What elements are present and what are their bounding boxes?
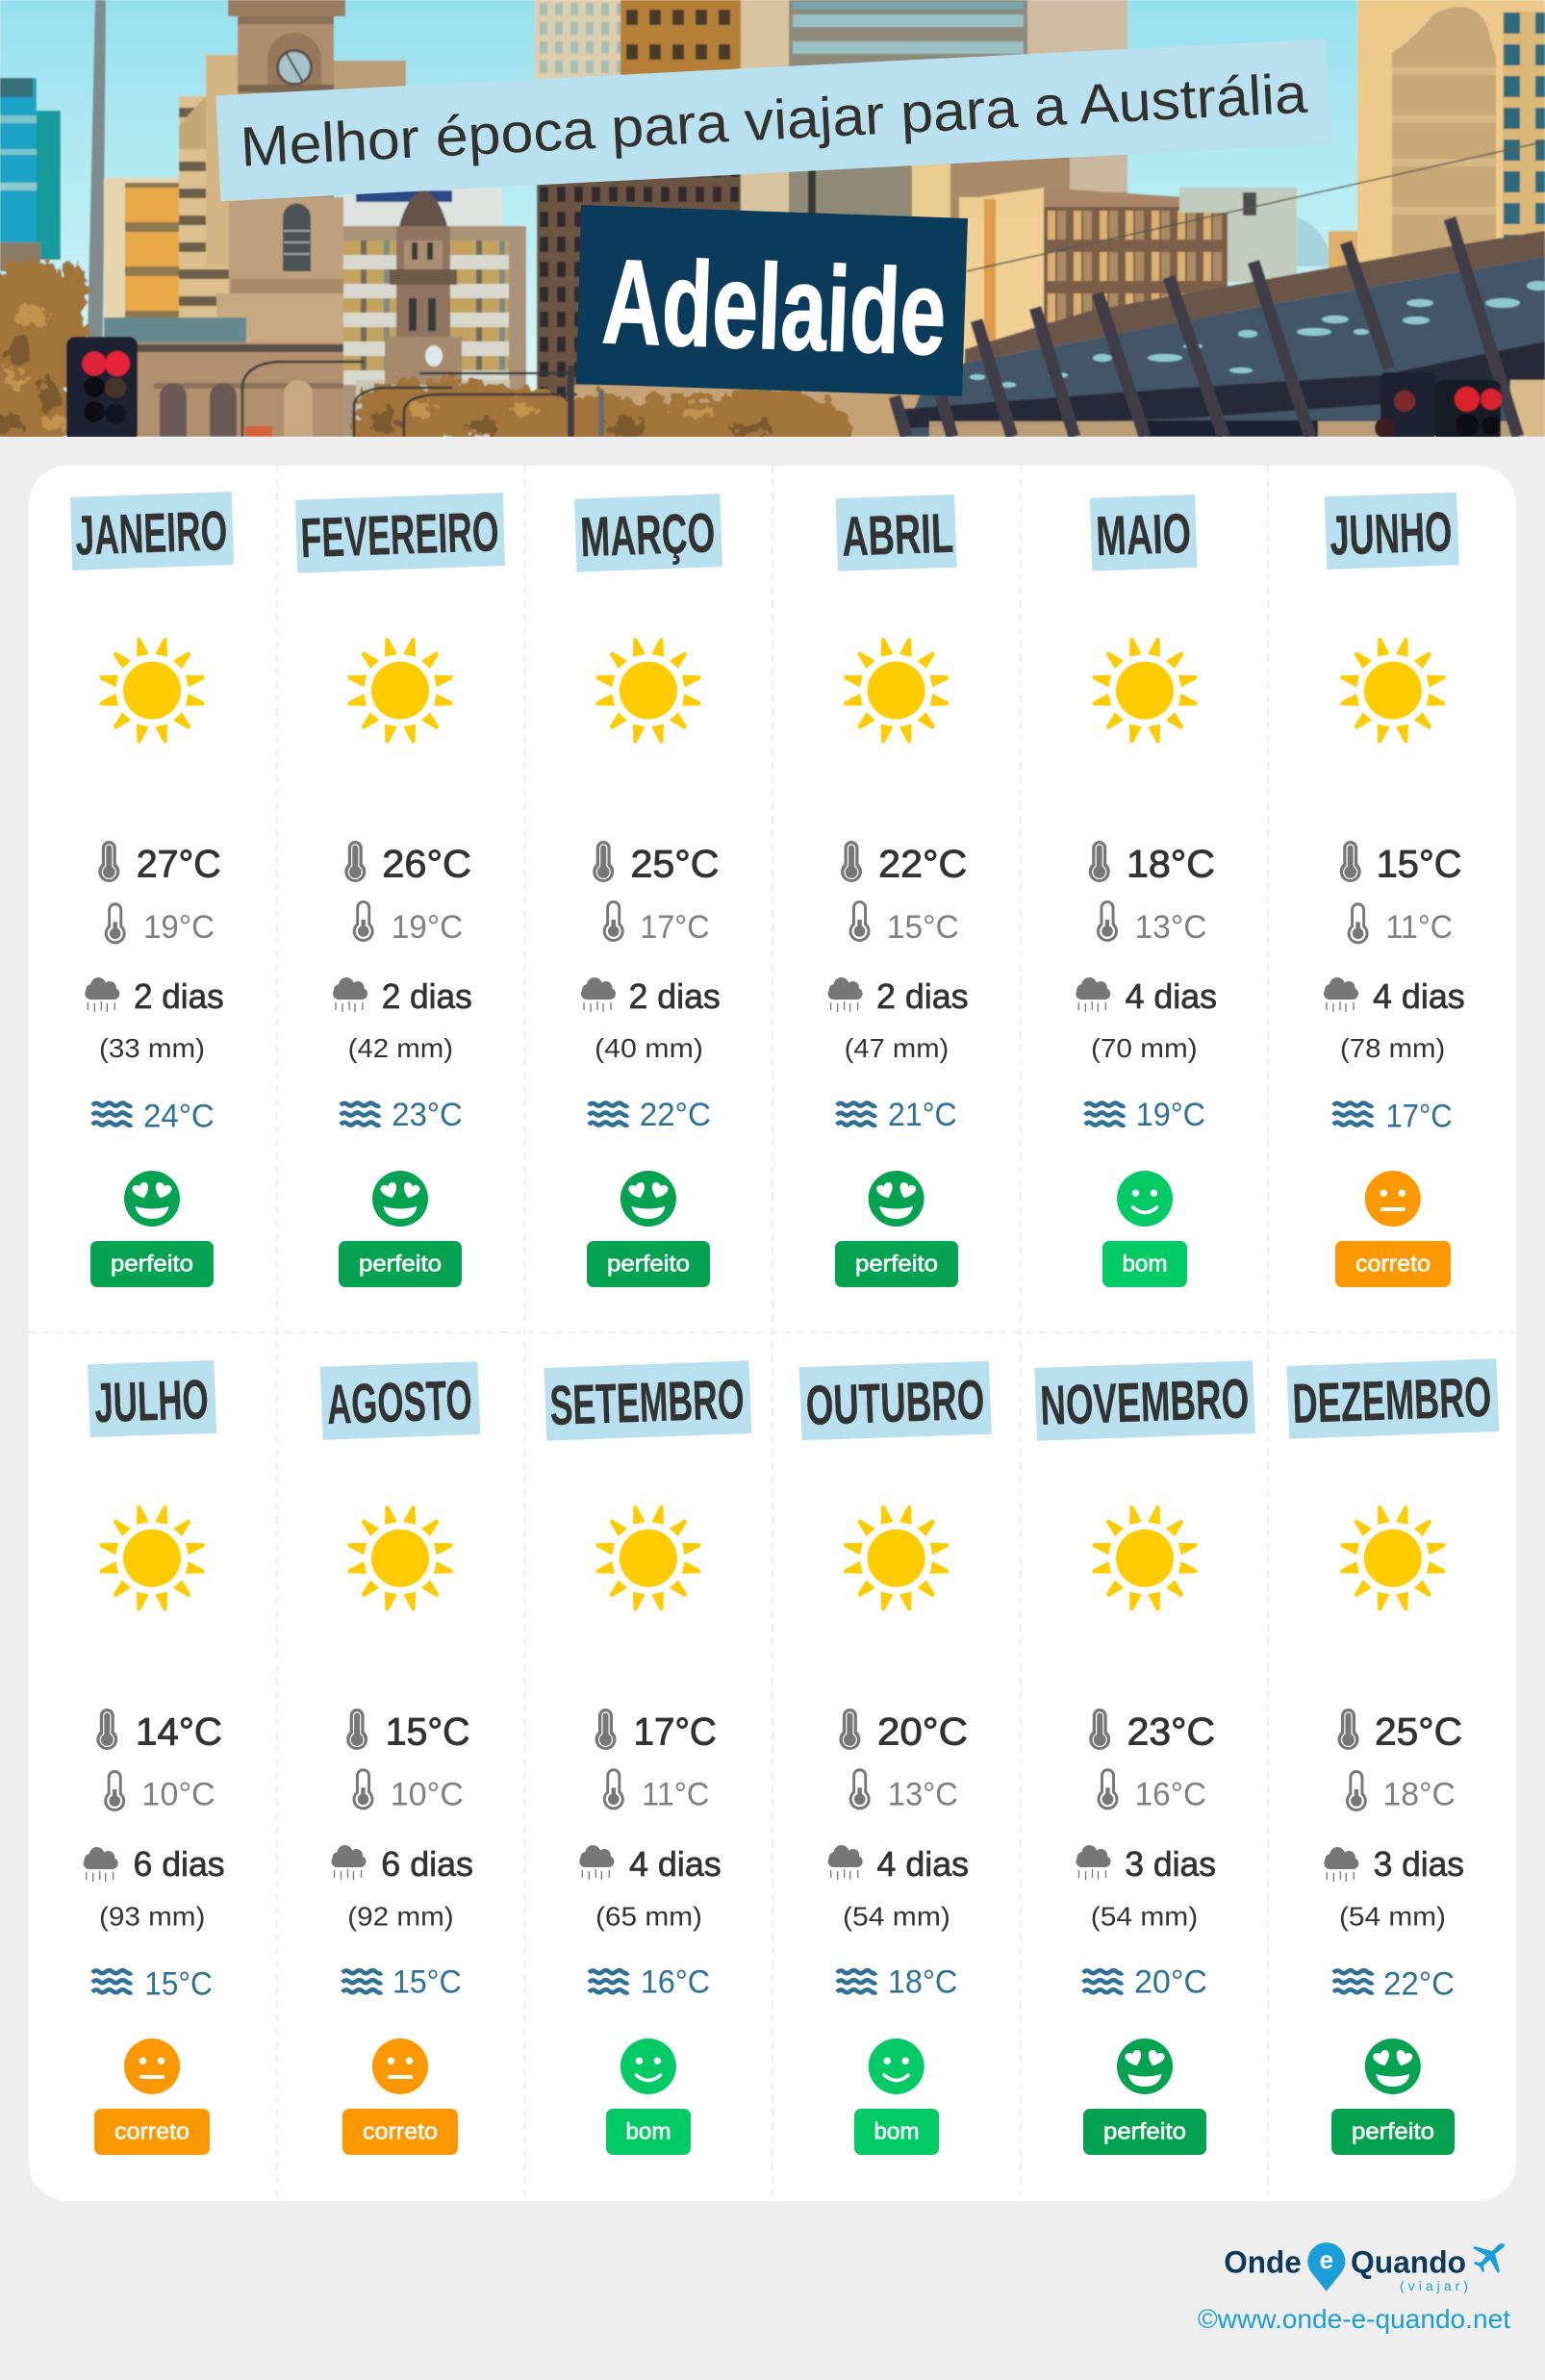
sea temperature — [1085, 1097, 1205, 1133]
panel: abril — [828, 494, 969, 1287]
church body — [216, 293, 351, 346]
panel: monthly climate card — [29, 466, 1516, 2201]
rating badge: perfeito — [1103, 2118, 1186, 2145]
icon: sun — [348, 1506, 452, 1610]
rainy days: 6 dias — [133, 1844, 225, 1884]
sea temperature: 18°C — [888, 1964, 957, 2001]
min temperature: 10°C — [391, 1777, 464, 1813]
rating badge: perfeito — [359, 1252, 442, 1278]
max temperature: 23°C — [1127, 1710, 1215, 1753]
rainy days — [1076, 976, 1217, 1016]
rating badge: bom — [874, 2118, 920, 2145]
rainy days: 2 dias — [134, 976, 224, 1016]
icon: sun — [100, 638, 204, 743]
rainy days — [1076, 1844, 1216, 1884]
icon: rating face — [1117, 2038, 1173, 2094]
sea temperature: 24°C — [143, 1099, 215, 1135]
panel: novembro — [1034, 1360, 1255, 2155]
rating badge: correto — [363, 2118, 438, 2145]
month label: junho — [1325, 493, 1459, 570]
rainfall: (42 mm) — [348, 1033, 453, 1063]
rainfall: (92 mm) — [347, 1901, 454, 1931]
title band: Melhor época para viajar para a Austrália — [239, 63, 1309, 179]
min temperature: 10°C — [141, 1777, 215, 1813]
max temperature — [1089, 1709, 1215, 1753]
min temperature: 18°C — [1383, 1777, 1456, 1813]
icon: rating face — [124, 1171, 180, 1227]
rainy days: 2 dias — [629, 976, 721, 1016]
max temperature: 14°C — [136, 1710, 222, 1753]
icon: sun — [596, 1506, 700, 1610]
rainy days: 2 dias — [382, 976, 472, 1016]
month label: agosto — [320, 1361, 480, 1440]
min temperature: 19°C — [392, 909, 463, 946]
rainy days — [1324, 1844, 1464, 1884]
icon: rating face — [1117, 1171, 1173, 1227]
max temperature: 20°C — [877, 1710, 968, 1753]
panel: julho — [84, 1360, 225, 2155]
rainfall: (54 mm) — [843, 1901, 950, 1931]
month label: fevereiro: FEVEREIRO — [299, 500, 500, 570]
rainy days: 3 dias — [1374, 1844, 1464, 1884]
sea temperature — [1333, 1099, 1453, 1135]
canopy struts — [895, 218, 1518, 437]
sea temperature: 17°C — [1385, 1099, 1453, 1135]
month label: agosto: AGOSTO — [326, 1369, 473, 1436]
logo: Onde e Quando: (viajar) — [1400, 2278, 1468, 2293]
rainfall: (93 mm) — [99, 1901, 205, 1931]
month label: março: MARÇO — [579, 501, 716, 569]
sea temperature — [342, 1964, 462, 2001]
rating badge: bom — [1122, 1252, 1168, 1278]
max temperature: 26°C — [382, 844, 471, 886]
ground fill under the centre — [573, 384, 922, 437]
icon: sun — [1341, 1506, 1445, 1610]
sea temperature — [92, 1965, 213, 2002]
sea temperature — [837, 1097, 957, 1133]
min temperature — [104, 1770, 215, 1813]
sea temperature: 21°C — [888, 1097, 957, 1133]
right golden tower — [1357, 0, 1545, 269]
sea temperature: 19°C — [1136, 1097, 1205, 1133]
min temperature — [353, 900, 463, 946]
rainy days: 4 dias — [629, 1844, 722, 1884]
min temperature — [105, 902, 215, 946]
sea temperature: 22°C — [640, 1097, 711, 1133]
min temperature: 16°C — [1135, 1777, 1206, 1813]
canopy highlights — [970, 281, 1545, 388]
icon: sun — [844, 638, 949, 743]
panel: agosto — [320, 1361, 480, 2155]
sea temperature — [837, 1964, 957, 2001]
rainy days — [579, 1844, 722, 1884]
min temperature: 11°C — [1385, 909, 1453, 946]
rating badge: perfeito — [855, 1252, 938, 1278]
icon: rating face — [869, 1171, 924, 1227]
sea temperature: 22°C — [1383, 1965, 1455, 2002]
icon: rating face — [621, 2038, 676, 2094]
month label: abril — [835, 494, 957, 571]
rainy days — [828, 976, 969, 1016]
panel: junho — [1324, 493, 1465, 1287]
min temperature — [352, 1768, 464, 1813]
logo: Onde e Quando: Onde — [1224, 2245, 1302, 2280]
canopy beam — [965, 231, 1545, 363]
icon: sun — [1093, 1506, 1197, 1610]
sea temperature — [92, 1099, 215, 1135]
sea temperature: 23°C — [392, 1097, 463, 1133]
small spire tower — [399, 189, 447, 226]
month label: julho: JULHO — [93, 1368, 210, 1434]
month label: outubro: OUTUBRO — [805, 1369, 985, 1437]
rating badge: perfeito — [1352, 2118, 1434, 2145]
centre towers — [535, 0, 621, 87]
min temperature — [1097, 1768, 1206, 1813]
panel: fevereiro — [295, 493, 505, 1287]
rating badge — [339, 1241, 462, 1287]
rating badge: correto — [114, 2118, 190, 2145]
overhead wire — [967, 141, 1545, 271]
big tower of the church — [237, 23, 335, 198]
city name band: Adelaide — [600, 235, 949, 380]
rating badge — [606, 2109, 691, 2155]
rainfall: (54 mm) — [1091, 1901, 1198, 1931]
icon: map pin: e — [1320, 2245, 1333, 2274]
rainy days — [331, 1844, 473, 1884]
min temperature — [1348, 902, 1453, 946]
canopy glass and rails — [904, 257, 1545, 437]
lamp post — [88, 0, 106, 337]
month label: setembro: SETEMBRO — [548, 1368, 746, 1437]
rating badge — [1083, 2109, 1206, 2155]
min temperature: 19°C — [143, 909, 215, 946]
max temperature: 15°C — [1377, 844, 1461, 886]
max temperature — [1089, 841, 1215, 886]
icon: plane — [1473, 2243, 1505, 2273]
max temperature: 22°C — [878, 844, 967, 886]
min temperature: 17°C — [640, 909, 710, 946]
max temperature — [595, 1709, 717, 1753]
min temperature: 11°C — [642, 1777, 709, 1813]
max temperature — [593, 841, 720, 886]
left glass tower — [0, 78, 37, 261]
rainfall: (78 mm) — [1340, 1033, 1445, 1063]
rating badge: bom — [625, 2118, 671, 2145]
website credit: ©www.onde-e-quando.net — [1198, 2304, 1510, 2334]
max temperature: 15°C — [386, 1710, 469, 1753]
logo: Onde e Quando: Quando — [1351, 2245, 1466, 2280]
max temperature: 25°C — [1375, 1710, 1462, 1753]
rainy days — [333, 976, 472, 1016]
street lamps — [242, 362, 577, 437]
yellow and cream buildings — [104, 178, 190, 317]
panel: março — [574, 494, 722, 1287]
rainfall: (65 mm) — [595, 1901, 702, 1931]
min temperature: 15°C — [887, 909, 959, 946]
month label: junho: JUNHO — [1329, 500, 1453, 568]
rating badge — [90, 1241, 214, 1287]
rating badge — [835, 1241, 958, 1287]
min temperature — [603, 900, 710, 946]
rainy days — [84, 1844, 225, 1884]
icon: sun — [1341, 638, 1445, 743]
panel: dezembro — [1286, 1358, 1499, 2155]
rating badge: perfeito — [607, 1252, 690, 1278]
icon: rating face — [621, 1171, 676, 1227]
rating badge: correto — [1355, 1252, 1431, 1278]
rainy days — [85, 976, 224, 1016]
month label: novembro: NOVEMBRO — [1039, 1367, 1250, 1437]
max temperature: 18°C — [1127, 844, 1215, 886]
rainy days: 4 dias — [1126, 976, 1217, 1016]
sea temperature: 20°C — [1134, 1964, 1207, 2001]
max temperature — [98, 841, 221, 886]
rainfall: (40 mm) — [595, 1033, 703, 1063]
traffic lights — [66, 337, 138, 443]
month label: janeiro — [70, 492, 234, 570]
sea temperature — [341, 1097, 463, 1133]
rainy days — [828, 1844, 969, 1884]
sea temperature — [589, 1097, 711, 1133]
max temperature — [839, 1709, 968, 1753]
rainy days — [581, 976, 721, 1016]
rainfall: (70 mm) — [1091, 1033, 1198, 1063]
rainy days: 3 dias — [1125, 1844, 1216, 1884]
month label: outubro — [799, 1361, 992, 1440]
icon: rating face — [372, 2038, 428, 2094]
icon: sun — [844, 1506, 949, 1610]
city name band — [576, 205, 968, 396]
panel: janeiro — [70, 492, 234, 1287]
rating badge — [1335, 1241, 1451, 1287]
rating badge — [854, 2109, 939, 2155]
rating badge — [587, 1241, 710, 1287]
rainfall: (47 mm) — [845, 1033, 949, 1063]
rainy days: 4 dias — [877, 1844, 969, 1884]
sea temperature: 15°C — [393, 1964, 462, 2001]
min temperature: 13°C — [888, 1777, 958, 1813]
icon: rating face — [124, 2038, 180, 2094]
icon: map pin — [1307, 2242, 1345, 2291]
rainy days — [1324, 976, 1465, 1016]
icon: sun — [348, 638, 452, 743]
panel: setembro — [544, 1360, 751, 2155]
rainy days: 6 dias — [381, 1844, 473, 1884]
month label: março — [574, 494, 722, 572]
rating badge — [94, 2109, 210, 2155]
rainfall: (33 mm) — [99, 1033, 205, 1063]
rating badge — [1331, 2109, 1455, 2155]
tan and brown block — [959, 197, 1046, 370]
icon: rating face — [1365, 1171, 1421, 1227]
icon: rating face — [869, 2038, 924, 2094]
icon: rating face — [372, 1171, 428, 1227]
rainy days: 2 dias — [876, 976, 969, 1016]
panel: outubro — [799, 1361, 992, 2155]
hero photo: Adelaide skyline — [0, 0, 1545, 476]
rating badge — [1102, 1241, 1187, 1287]
month label: maio — [1090, 494, 1198, 571]
rating badge: perfeito — [111, 1252, 193, 1278]
icon: rating face — [1365, 2038, 1421, 2094]
month label: janeiro: JANEIRO — [74, 499, 228, 568]
max temperature — [1337, 1709, 1462, 1753]
rainy days: 4 dias — [1373, 976, 1465, 1016]
rainfall: (54 mm) — [1339, 1901, 1446, 1931]
max temperature — [346, 1709, 469, 1753]
max temperature — [1340, 841, 1461, 886]
background office block with sign — [343, 188, 502, 228]
month label: novembro — [1034, 1360, 1255, 1441]
max temperature: 17°C — [633, 1710, 717, 1753]
title band — [215, 38, 1331, 201]
icon: sun — [100, 1506, 204, 1610]
month label: maio: MAIO — [1095, 502, 1192, 568]
sea temperature — [1083, 1964, 1207, 2001]
max temperature — [344, 841, 471, 886]
trees left and bottom — [0, 257, 854, 437]
panel: maio — [1076, 494, 1217, 1287]
min temperature: 13°C — [1135, 909, 1206, 946]
icon: sun — [1093, 638, 1197, 743]
logo: Onde e Quando — [1224, 2242, 1505, 2293]
min temperature — [603, 1768, 709, 1813]
max temperature — [96, 1709, 222, 1753]
min temperature — [1097, 900, 1206, 946]
month label: abril: ABRIL — [841, 502, 954, 569]
month label: setembro — [544, 1360, 751, 1441]
month label: fevereiro — [295, 493, 505, 573]
sea temperature — [589, 1964, 710, 2001]
min temperature — [848, 900, 959, 946]
min temperature — [1346, 1770, 1456, 1813]
icon: sun — [596, 638, 700, 743]
sea temperature: 16°C — [641, 1964, 710, 2001]
sea temperature: 15°C — [144, 1965, 213, 2002]
pale building with glass — [1228, 188, 1297, 282]
sea temperature — [1333, 1965, 1455, 2002]
max temperature: 27°C — [137, 844, 221, 886]
rating badge — [342, 2109, 458, 2155]
max temperature: 25°C — [631, 844, 720, 886]
min temperature — [849, 1768, 958, 1813]
month label: julho — [88, 1360, 216, 1437]
max temperature — [841, 841, 967, 886]
